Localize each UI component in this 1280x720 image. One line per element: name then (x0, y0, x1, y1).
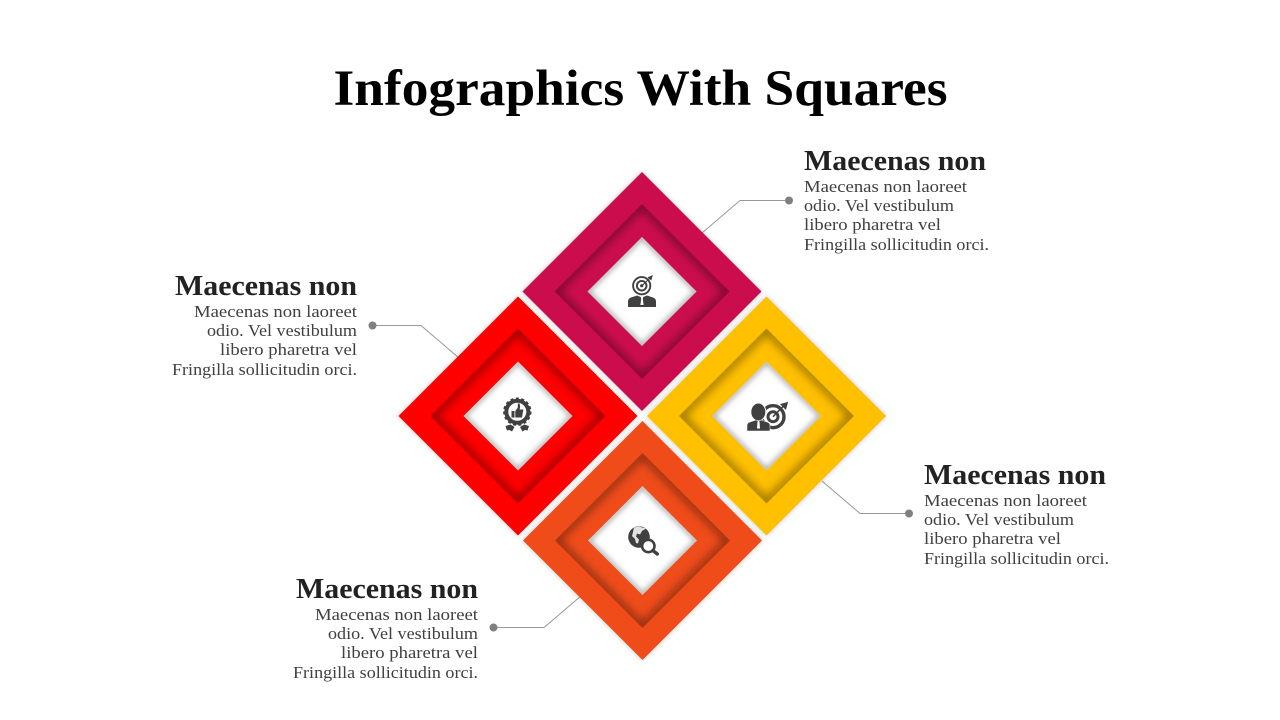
body: Maecenas non laoreet (804, 177, 967, 196)
body: libero pharetra vel (924, 529, 1061, 548)
leader line: bottom (490, 596, 581, 632)
diamond: red left (398, 296, 638, 536)
text block: right (924, 459, 1109, 568)
icon: businessman beside target (747, 403, 787, 431)
diamond: orange bottom (523, 421, 762, 660)
body: odio. Vel vestibulum (328, 624, 478, 643)
body: Fringilla sollicitudin orci. (804, 235, 989, 254)
heading: Maecenas non (804, 145, 986, 177)
body: libero pharetra vel (341, 643, 478, 662)
leader line: left (368, 322, 459, 358)
body: odio. Vel vestibulum (804, 196, 954, 215)
body (924, 491, 1109, 568)
body (804, 177, 989, 254)
title: Infographics With Squares (334, 61, 948, 117)
text block: top right (804, 145, 989, 254)
body: Maecenas non laoreet (194, 302, 357, 321)
body: libero pharetra vel (804, 215, 941, 234)
heading: Maecenas non (924, 459, 1106, 491)
body: odio. Vel vestibulum (207, 321, 357, 340)
icon: thumbs-up badge (504, 399, 530, 432)
body: odio. Vel vestibulum (924, 510, 1074, 529)
body: Maecenas non laoreet (924, 491, 1087, 510)
body: Maecenas non laoreet (315, 605, 478, 624)
body: Fringilla sollicitudin orci. (293, 663, 478, 682)
body (293, 605, 478, 682)
diamond: amber right (647, 296, 886, 536)
heading: Maecenas non (296, 573, 478, 605)
text block: bottom left (293, 573, 478, 682)
body: Fringilla sollicitudin orci. (172, 360, 357, 379)
heading: Maecenas non (175, 270, 357, 302)
body: libero pharetra vel (220, 340, 357, 359)
leader line: right (822, 481, 913, 518)
text block: left (172, 270, 357, 379)
icon: businessman with target head (628, 276, 656, 307)
diamond: crimson top (522, 172, 762, 411)
leader line: top (702, 196, 793, 233)
body: Fringilla sollicitudin orci. (924, 549, 1109, 568)
body (172, 302, 357, 379)
icon: globe with magnifier (628, 526, 657, 554)
